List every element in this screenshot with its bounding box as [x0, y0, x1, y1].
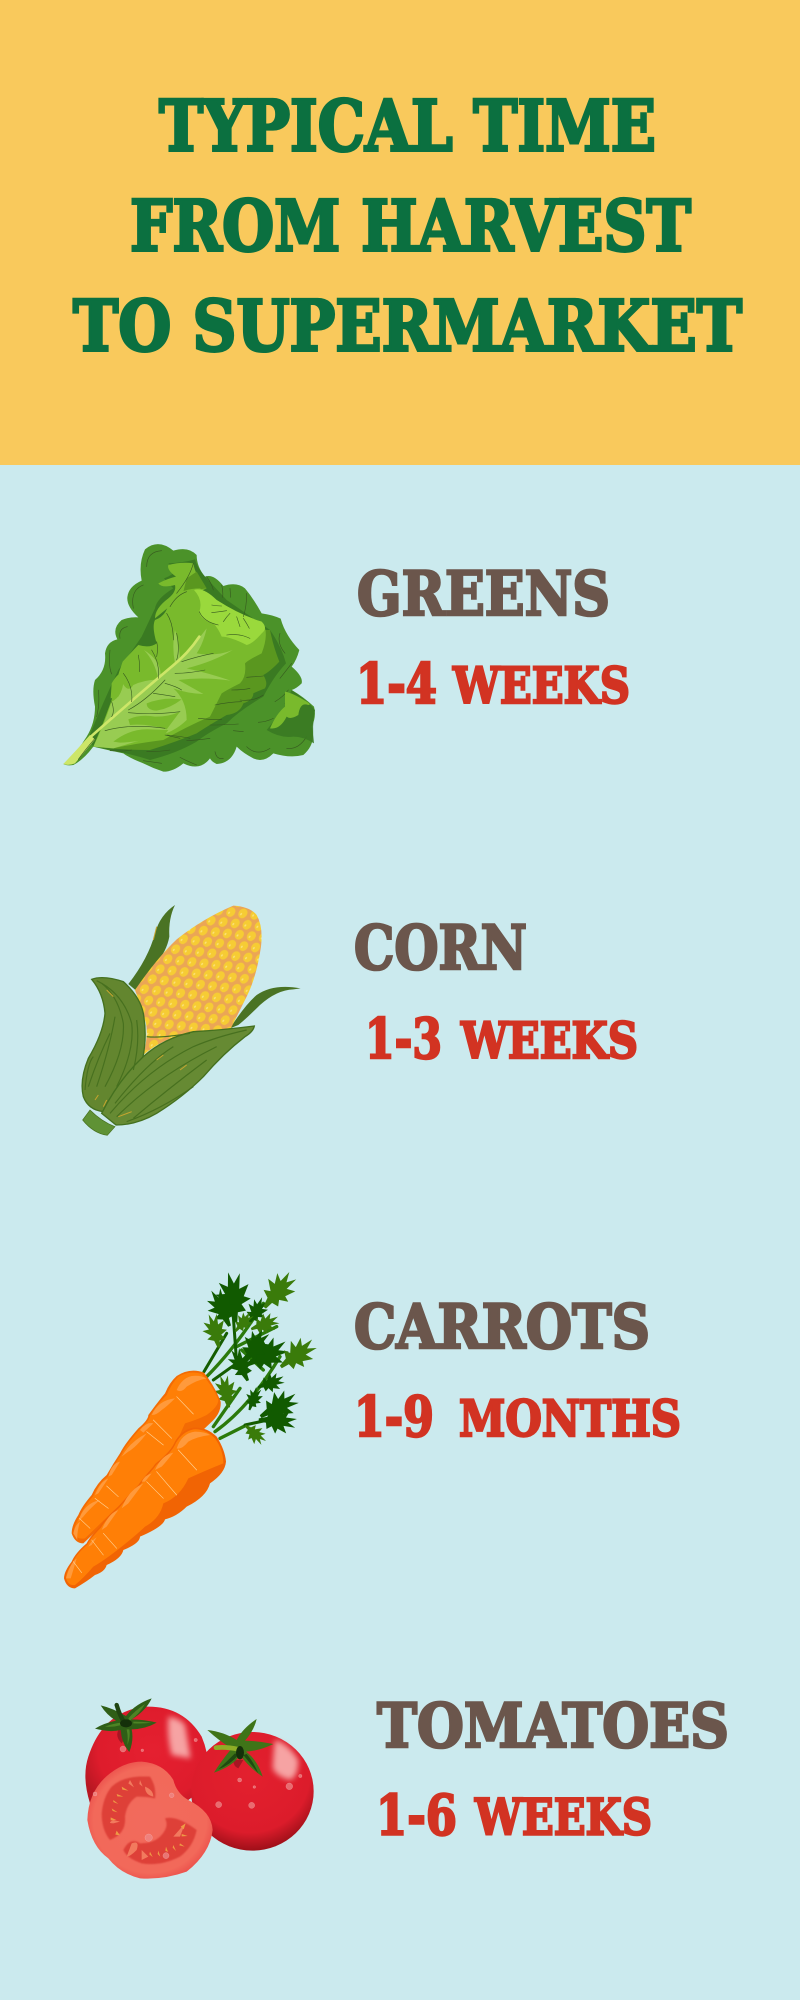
- icon: carrots: [64, 1264, 322, 1588]
- label: tomatoes: TOMATOES: [377, 1691, 729, 1762]
- label: greens: 1-4: [356, 651, 437, 716]
- label: tomatoes: WEEKS: [474, 1788, 652, 1846]
- right calyx: [233, 1760, 243, 1768]
- label: tomatoes: 1-6: [376, 1782, 457, 1848]
- icon: lettuce greens: [63, 544, 315, 772]
- light leaf tufts: [199, 1264, 322, 1449]
- title: [73, 84, 742, 368]
- label: carrots: 1-9: [354, 1384, 434, 1449]
- carrot highlights: [66, 1376, 210, 1578]
- title: TYPICAL TIME: [159, 84, 656, 168]
- label: greens: WEEKS: [452, 656, 630, 715]
- content background panel: [0, 465, 800, 2000]
- water droplets: [93, 1738, 302, 1859]
- label: carrots: [354, 1292, 681, 1449]
- dark leaf tufts: [201, 1271, 304, 1434]
- lettuce leaf blade patches: [111, 673, 182, 743]
- icon: tomatoes: [85, 1698, 314, 1879]
- label: greens: GREENS: [357, 559, 610, 630]
- label: corn: CORN: [354, 913, 527, 984]
- label: corn: [354, 913, 638, 1071]
- left calyx: [117, 1730, 130, 1743]
- icon: corn: [82, 905, 301, 1135]
- label: greens: [356, 559, 630, 716]
- back carrot: [72, 1371, 221, 1543]
- right whole tomato: [191, 1732, 314, 1851]
- label: tomatoes: [376, 1691, 729, 1848]
- front carrot: [64, 1428, 226, 1588]
- label: carrots: MONTHS: [459, 1389, 681, 1448]
- label: carrots: CARROTS: [354, 1292, 650, 1363]
- title: FROM HARVEST: [130, 184, 691, 268]
- cut tomato half: [87, 1762, 213, 1879]
- label: corn: WEEKS: [460, 1011, 638, 1070]
- left whole tomato: [85, 1707, 208, 1813]
- header panel: [0, 0, 800, 465]
- label: corn: 1-3: [365, 1006, 442, 1071]
